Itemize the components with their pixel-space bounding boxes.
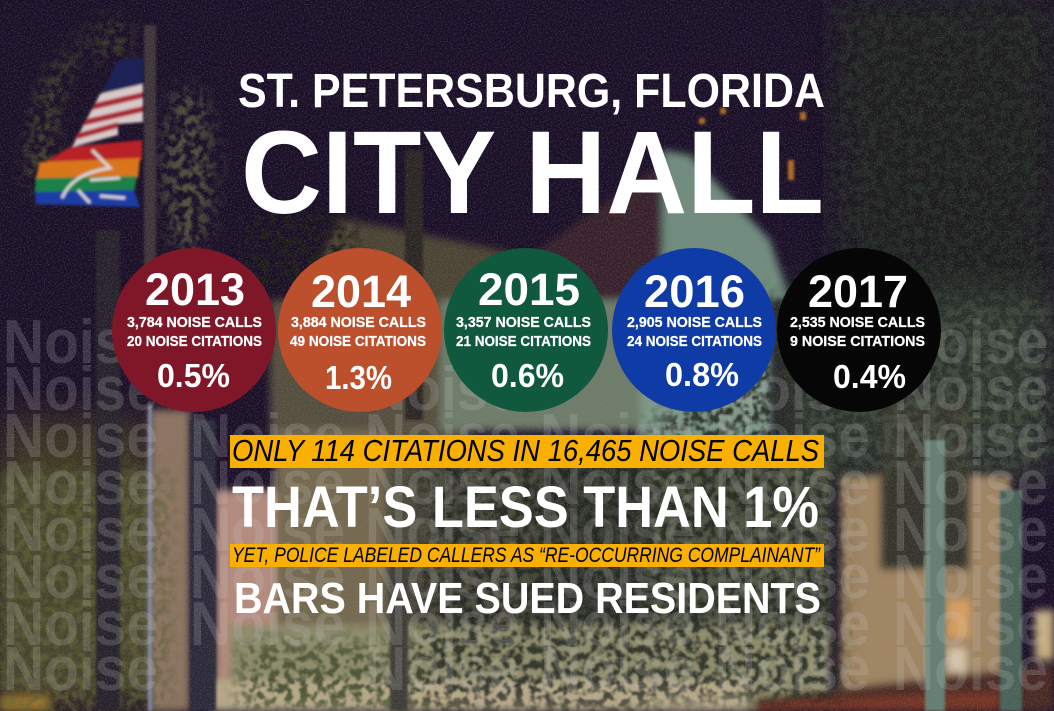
watermark: repeated Noise text: Noise bbox=[365, 355, 520, 424]
watermark: repeated Noise text: Noise bbox=[190, 402, 345, 471]
watermark: repeated Noise text: Noise bbox=[540, 635, 695, 704]
panel: 2017: 9 NOISE CITATIONS bbox=[790, 334, 925, 350]
panel: 2016 bbox=[612, 248, 776, 412]
watermark: repeated Noise text: Noise bbox=[365, 449, 520, 518]
watermark: repeated Noise text: Noise bbox=[3, 635, 158, 704]
panel: 2017: 2017 bbox=[808, 266, 908, 317]
watermark: repeated Noise text: Noise bbox=[3, 496, 158, 565]
watermark: repeated Noise text: Noise bbox=[365, 496, 520, 565]
panel: 2017: 0.4% bbox=[833, 358, 906, 395]
watermark: repeated Noise text: Noise bbox=[3, 590, 158, 659]
watermark: repeated Noise text: Noise bbox=[190, 543, 345, 612]
watermark: repeated Noise text: Noise bbox=[715, 402, 870, 471]
callout: only 114 citations: ONLY 114 CITATIONS IN 16,465 NOISE CALLS bbox=[232, 433, 819, 468]
panel: 2016: 0.8% bbox=[665, 356, 739, 393]
panel: 2013 bbox=[112, 248, 276, 412]
panel: 2015: 21 NOISE CITATIONS bbox=[456, 334, 591, 350]
heading: City Hall: CITY HALL bbox=[241, 107, 824, 239]
watermark: repeated Noise text: Noise bbox=[715, 449, 870, 518]
panel: 2017: 2,535 NOISE CALLS bbox=[790, 315, 925, 331]
callout: re-occurring complainant: YET, POLICE LABELED CALLERS AS “RE-OCCURRING COMPLAINANT” bbox=[232, 544, 821, 567]
panel: 2015: 0.6% bbox=[491, 357, 564, 394]
panel: 2016: 2016 bbox=[644, 266, 745, 317]
panel: 2014 bbox=[278, 248, 442, 412]
panel: 2014: 1.3% bbox=[325, 359, 392, 396]
watermark: repeated Noise text: Noise bbox=[715, 543, 870, 612]
watermark: repeated Noise text: Noise bbox=[3, 449, 158, 518]
watermark: repeated Noise text: Noise bbox=[715, 496, 870, 565]
watermark: repeated Noise text: Noise bbox=[715, 635, 870, 704]
watermark: repeated Noise text: Noise bbox=[715, 355, 870, 424]
panel: 2017 bbox=[777, 248, 941, 412]
watermark: repeated Noise text: Noise bbox=[190, 496, 345, 565]
orange lights bbox=[699, 108, 806, 180]
heading: bars have sued residents: BARS HAVE SUED RESIDENTS bbox=[234, 574, 821, 623]
watermark: repeated Noise text: Noise bbox=[3, 402, 158, 471]
panel: 2013: 2013 bbox=[145, 264, 245, 315]
panel: 2014: 3,884 NOISE CALLS bbox=[291, 315, 426, 331]
watermark: repeated Noise text: Noise bbox=[365, 543, 520, 612]
watermark: repeated Noise text: Noise bbox=[540, 590, 695, 659]
panel: 2014: 49 NOISE CITATIONS bbox=[290, 334, 426, 350]
watermark: repeated Noise text: Noise bbox=[3, 308, 158, 377]
panel: 2016: 24 NOISE CITATIONS bbox=[627, 334, 762, 350]
watermark: repeated Noise text: Noise bbox=[540, 543, 695, 612]
panel: 2014: 2014 bbox=[311, 266, 411, 317]
watermark: repeated Noise text: Noise bbox=[540, 496, 695, 565]
watermark: repeated Noise text: Noise bbox=[3, 543, 158, 612]
panel: 2016: 2,905 NOISE CALLS bbox=[627, 315, 762, 331]
panel: 2013: 20 NOISE CITATIONS bbox=[127, 334, 262, 350]
heading: that's less than 1%: THAT’S LESS THAN 1% bbox=[232, 475, 819, 540]
watermark: repeated Noise text: Noise bbox=[3, 355, 158, 424]
panel: 2013: 0.5% bbox=[157, 357, 230, 394]
watermark: repeated Noise text: Noise bbox=[540, 402, 695, 471]
watermark: repeated Noise text: Noise bbox=[365, 635, 520, 704]
panel: 2015: 2015 bbox=[478, 264, 580, 315]
watermark: repeated Noise text: Noise bbox=[365, 402, 520, 471]
title: St. Petersburg, Florida: ST. PETERSBURG, FLORIDA bbox=[238, 65, 825, 118]
watermark: repeated Noise text bbox=[3, 308, 1048, 704]
panel: 2015: 3,357 NOISE CALLS bbox=[456, 315, 591, 331]
watermark: repeated Noise text: Noise bbox=[540, 449, 695, 518]
watermark: repeated Noise text: Noise bbox=[190, 449, 345, 518]
icon: flags on flagpole bbox=[35, 58, 143, 207]
panel: 2015 bbox=[444, 248, 608, 412]
panel: 2013: 3,784 NOISE CALLS bbox=[127, 315, 262, 331]
watermark: repeated Noise text: Noise bbox=[365, 590, 520, 659]
watermark: repeated Noise text: Noise bbox=[715, 590, 870, 659]
building roof and walls bbox=[300, 218, 535, 300]
watermark: repeated Noise text: Noise bbox=[190, 590, 345, 659]
